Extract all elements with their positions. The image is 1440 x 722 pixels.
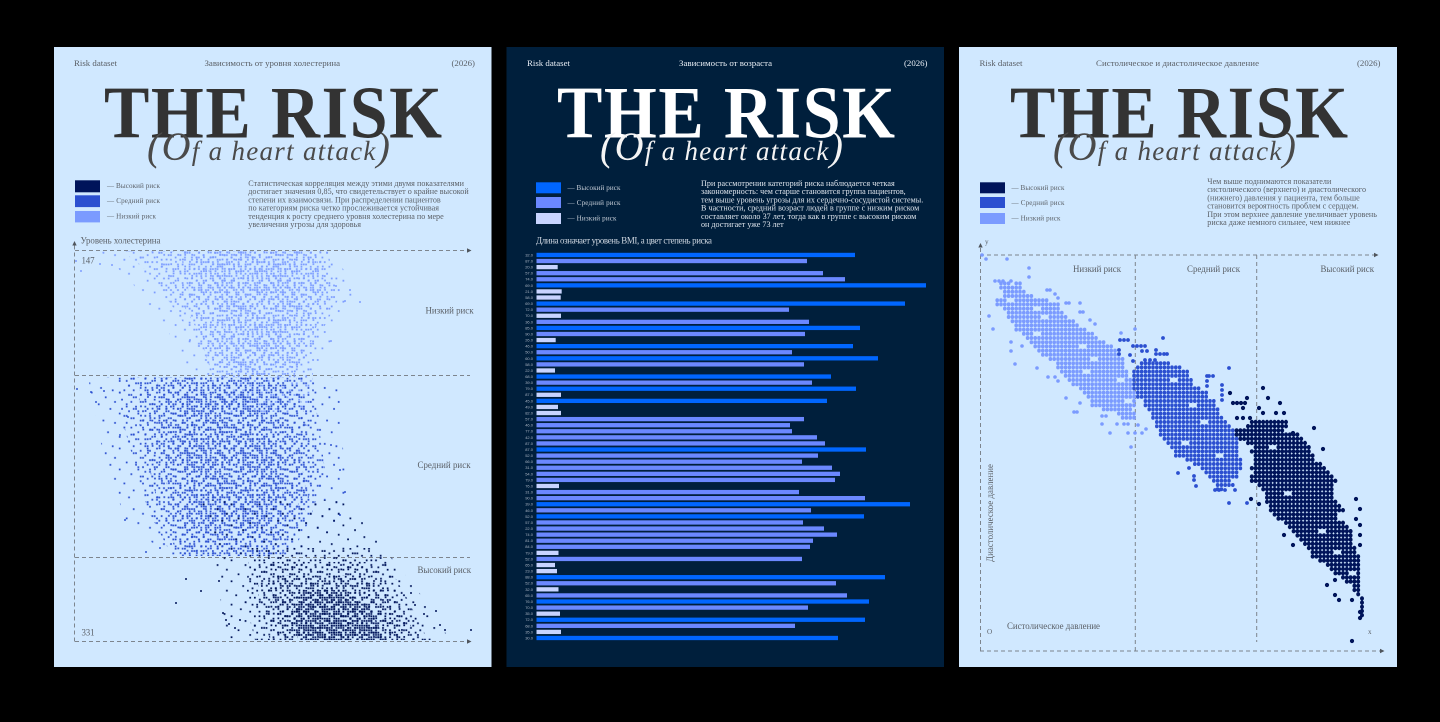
subtitle: (Of a heart attack) xyxy=(147,124,390,169)
bar chart: BMI by age: 35.0 xyxy=(525,611,534,616)
bar chart: BMI by age: 32.0 xyxy=(525,252,534,257)
description text: В частности, средний возраст людей в группе с низким риском xyxy=(701,204,919,213)
bar chart: BMI by age: 31.0 xyxy=(525,465,534,470)
bar chart: BMI by age: 52.0 xyxy=(525,581,534,586)
bar chart: BMI by age: 87.0 xyxy=(525,392,534,397)
description text: риска даже немного сильнее, чем нижнее xyxy=(1207,218,1351,227)
axis labels: Средний риск xyxy=(418,460,471,470)
description text: Статистическая корреляция между этими двумя показателями xyxy=(248,179,465,188)
axis labels: Высокий риск xyxy=(1320,264,1375,274)
bar chart: BMI by age xyxy=(525,252,926,640)
description text: При рассмотрении категорий риска наблюдается четкая xyxy=(701,179,895,188)
legend: — Низкий риск xyxy=(1010,214,1061,222)
description text: составляет около 37 лет, тогда как в группе с высоким риском xyxy=(701,212,916,221)
bar chart: BMI by age: 54.0 xyxy=(525,471,534,476)
axis labels: 331 xyxy=(82,628,94,638)
bar chart: BMI by age: 46.0 xyxy=(525,344,534,349)
bar chart: BMI by age: 52.0 xyxy=(525,556,534,561)
bar chart: BMI by age: 84.0 xyxy=(525,544,534,549)
axes and risk dividers xyxy=(72,241,472,644)
legend xyxy=(75,180,161,222)
description text: по категориям риска четко прослеживается устойчивая xyxy=(248,204,439,213)
axes and risk dividers xyxy=(978,243,1384,653)
bar chart: BMI by age: 23.0 xyxy=(525,569,534,574)
bar chart: BMI by age: 87.0 xyxy=(525,258,534,263)
bar chart: BMI by age: 90.0 xyxy=(525,496,534,501)
bar chart: BMI by age: 74.0 xyxy=(525,277,534,282)
axis labels: Высокий риск xyxy=(418,565,472,575)
bar chart: BMI by age: 87.0 xyxy=(525,447,534,452)
bar chart: BMI by age: 20.0 xyxy=(525,265,534,270)
header row: (2026) xyxy=(1357,58,1381,68)
scatter chart: systolic vs diastolic pressure xyxy=(978,243,1384,653)
bar chart: BMI by age: 22.0 xyxy=(525,368,534,373)
bar chart: BMI by age: 88.0 xyxy=(525,575,534,580)
description text: достигает значения 0,85, что свидетельствует о крайне высокой xyxy=(248,187,469,196)
bar chart: BMI by age: 85.0 xyxy=(525,325,534,330)
bar chart: BMI by age: 65.0 xyxy=(525,562,534,567)
points: medium risk xyxy=(1119,338,1247,503)
axis labels xyxy=(80,236,474,638)
header row: Risk dataset xyxy=(980,58,1023,68)
bar chart: BMI by age: 60.0 xyxy=(525,356,534,361)
points: low risk xyxy=(76,251,360,412)
header row: (2026) xyxy=(904,58,928,68)
header row xyxy=(980,58,1381,68)
legend xyxy=(980,182,1065,224)
axis labels: Низкий риск xyxy=(426,306,474,316)
bar chart: BMI by age: 57.0 xyxy=(525,417,534,422)
description text xyxy=(701,179,923,229)
description text: степени их взаимосвязи. При распределении пациентов xyxy=(248,195,441,204)
bar chart: BMI by age: 79.0 xyxy=(525,477,534,482)
bar chart: BMI by age: 46.0 xyxy=(525,423,534,428)
bar chart: BMI by age: 76.0 xyxy=(525,599,534,604)
bar chart: BMI by age: 79.0 xyxy=(525,550,534,555)
points: medium risk xyxy=(77,377,346,556)
bar chart: BMI by age: 31.0 xyxy=(525,490,534,495)
bar chart: BMI by age: 76.0 xyxy=(525,483,534,488)
panel: cholesterol xyxy=(54,47,492,667)
axis labels: у xyxy=(985,238,989,246)
bar chart: BMI by age: 69.0 xyxy=(525,301,534,306)
header row: Зависимость от возраста xyxy=(679,58,772,68)
points: high risk xyxy=(176,500,471,640)
axis labels: 147 xyxy=(82,256,95,266)
title: THE RISK xyxy=(557,73,895,154)
description text: увеличения угрозы для здоровья xyxy=(248,220,361,229)
bar chart: BMI by age: 58.0 xyxy=(525,362,534,367)
bar chart: BMI by age: 70.0 xyxy=(525,605,534,610)
axis labels: Диастолическое давление xyxy=(985,464,995,562)
bar chart: BMI by age: 52.0 xyxy=(525,514,534,519)
description text: становится вероятность проблем с сердцем. xyxy=(1207,202,1359,211)
bar chart: BMI by age: 69.0 xyxy=(525,283,534,288)
points: low risk xyxy=(982,255,1146,447)
header row: Систолическое и диастолическое давление xyxy=(1096,58,1259,68)
points: high risk xyxy=(1230,388,1362,641)
bar chart: BMI by age: 42.0 xyxy=(525,435,534,440)
axis labels: Низкий риск xyxy=(1073,264,1122,274)
bar chart: BMI by age: 90.0 xyxy=(525,331,534,336)
legend: — Средний риск xyxy=(566,199,621,207)
panel: age xyxy=(506,47,944,667)
chart caption: Длина означает уровень BMI, а цвет степень риска xyxy=(536,236,712,246)
legend: — Средний риск xyxy=(1010,199,1065,207)
subtitle: (Of a heart attack) xyxy=(600,124,843,169)
axis labels: х xyxy=(1368,628,1372,636)
axis labels: Средний риск xyxy=(1187,264,1241,274)
description text: Чем выше поднимаются показатели xyxy=(1207,177,1332,186)
bar chart: BMI by age: 68.0 xyxy=(525,623,534,628)
bar chart: BMI by age: 68.0 xyxy=(525,374,534,379)
bar chart: BMI by age: 65.0 xyxy=(525,593,534,598)
legend xyxy=(536,182,621,224)
bar chart: BMI by age: 72.0 xyxy=(525,617,534,622)
legend: — Низкий риск xyxy=(566,214,617,222)
bar chart: BMI by age: 58.0 xyxy=(525,295,534,300)
description text: тем выше уровень угрозы для их сердечно-сосудистой системы. xyxy=(701,195,923,204)
bar chart: BMI by age: 35.0 xyxy=(525,629,534,634)
bar chart: BMI by age: 39.0 xyxy=(525,380,534,385)
legend: — Высокий риск xyxy=(566,184,621,192)
description text: он достигает уже 73 лет xyxy=(701,220,784,229)
legend: — Низкий риск xyxy=(106,213,157,221)
axis labels: О xyxy=(987,628,992,636)
bar chart: BMI by age: 30.0 xyxy=(525,635,534,640)
header row: Risk dataset xyxy=(74,58,118,68)
bar chart: BMI by age: 50.0 xyxy=(525,350,534,355)
title: THE RISK xyxy=(1010,73,1348,154)
bar chart: BMI by age: 39.0 xyxy=(525,502,534,507)
legend: — Средний риск xyxy=(106,197,161,205)
axis labels: Уровень холестерина xyxy=(80,236,161,246)
scatter chart: cholesterol by risk xyxy=(72,241,472,644)
bar chart: BMI by age: 82.0 xyxy=(525,410,534,415)
bar chart: BMI by age: 57.0 xyxy=(525,520,534,525)
description text: систолического (верхнего) и диастолического xyxy=(1207,185,1366,194)
description text xyxy=(248,179,469,229)
title: THE RISK xyxy=(104,73,442,154)
bar chart: BMI by age: 87.0 xyxy=(525,441,534,446)
description text: При этом верхнее давление увеличивает уровень xyxy=(1207,210,1377,219)
bar chart: BMI by age: 45.0 xyxy=(525,398,534,403)
subtitle: (Of a heart attack) xyxy=(1053,124,1296,169)
axis labels xyxy=(985,238,1375,636)
header row: (2026) xyxy=(452,58,475,68)
bar chart: BMI by age: 36.0 xyxy=(525,319,534,324)
legend: — Высокий риск xyxy=(1010,184,1065,192)
bar chart: BMI by age: 72.0 xyxy=(525,307,534,312)
legend: — Высокий риск xyxy=(106,182,161,190)
bar chart: BMI by age: 21.0 xyxy=(525,289,534,294)
description text: закономерность: чем старше становится группа пациентов, xyxy=(701,187,906,196)
description text: тенденция к росту среднего уровня холестерина по мере xyxy=(248,212,444,221)
bar chart: BMI by age: 46.0 xyxy=(525,508,534,513)
panel: blood pressure xyxy=(959,47,1397,667)
description text: (нижнего) давления у пациента, тем больше xyxy=(1207,193,1360,202)
bar chart: BMI by age: 26.0 xyxy=(525,338,534,343)
bar chart: BMI by age: 22.0 xyxy=(525,526,534,531)
bar chart: BMI by age: 81.0 xyxy=(525,538,534,543)
bar chart: BMI by age: 49.0 xyxy=(525,404,534,409)
bar chart: BMI by age: 79.0 xyxy=(525,386,534,391)
bar chart: BMI by age: 70.0 xyxy=(525,313,534,318)
axis labels: Систолическое давление xyxy=(1007,621,1100,631)
bar chart: BMI by age: 74.0 xyxy=(525,532,534,537)
bar chart: BMI by age: 52.0 xyxy=(525,453,534,458)
description text xyxy=(1207,177,1377,227)
header row: Risk dataset xyxy=(527,58,571,68)
header row xyxy=(527,58,928,68)
bar chart: BMI by age: 32.0 xyxy=(525,587,534,592)
header row xyxy=(74,58,475,68)
bar chart: BMI by age: 57.0 xyxy=(525,271,534,276)
bar chart: BMI by age: 77.0 xyxy=(525,429,534,434)
header row: Зависимость от уровня холестерина xyxy=(204,58,340,68)
bar chart: BMI by age: 66.0 xyxy=(525,459,534,464)
